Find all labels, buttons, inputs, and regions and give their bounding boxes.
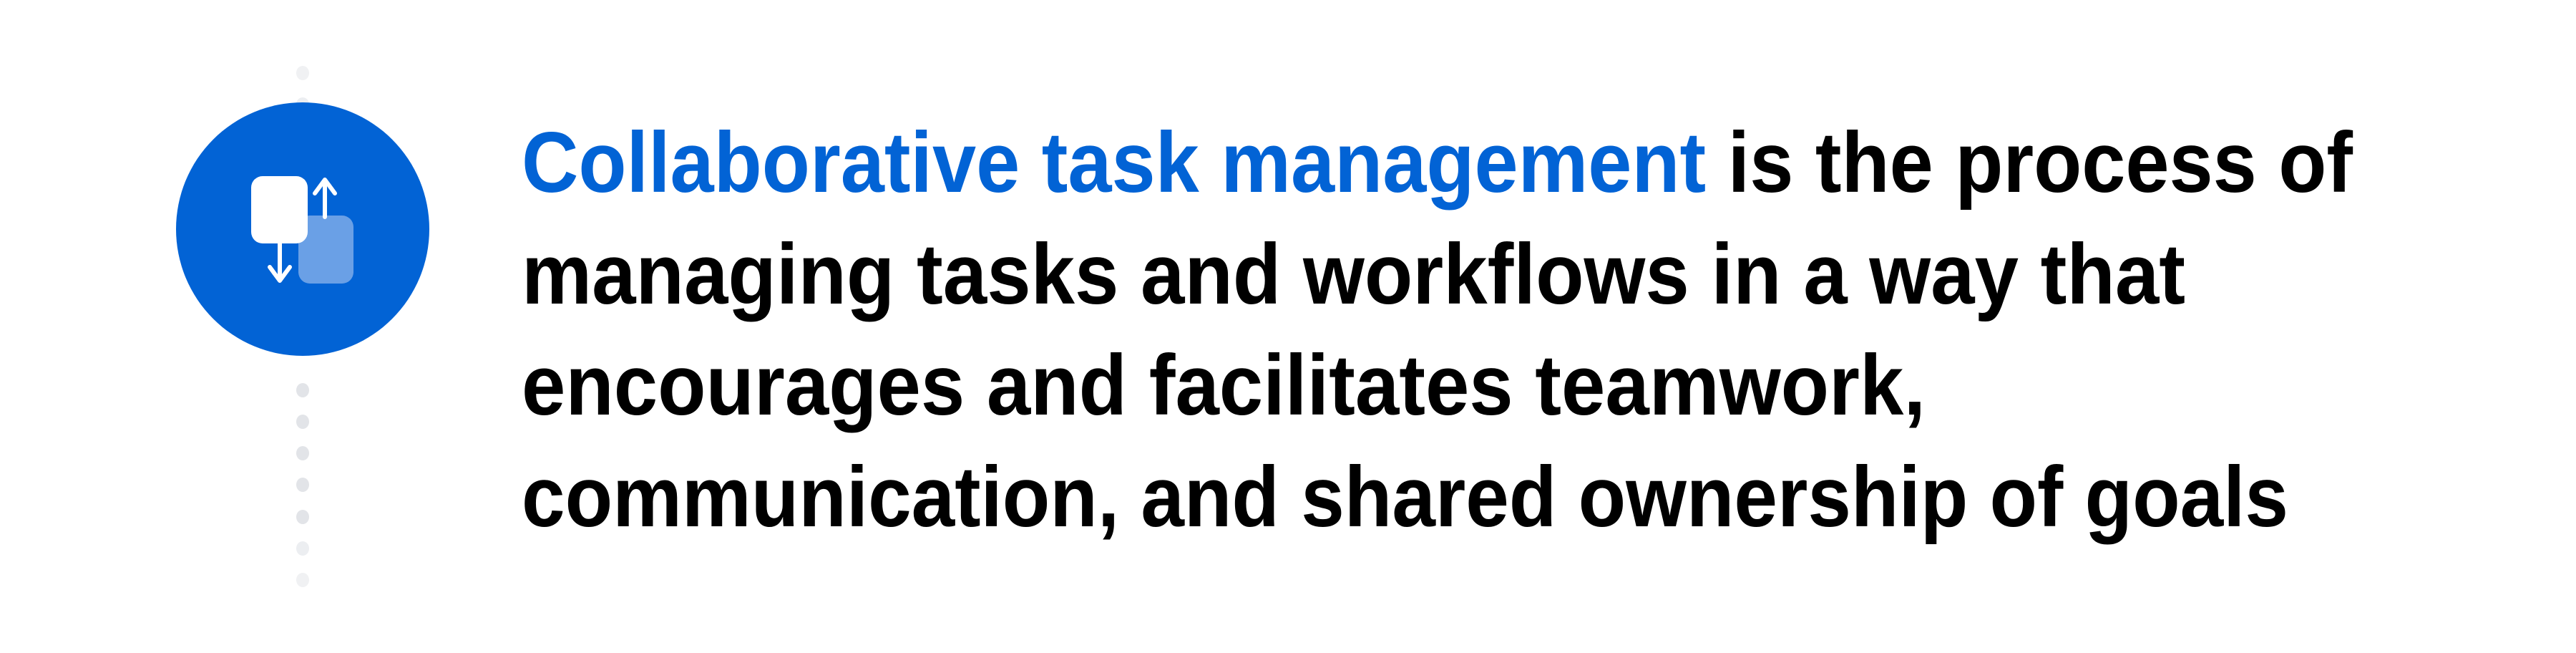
- dotted timeline: [296, 66, 309, 587]
- text block: definition: Collaborative task management is the process of: [522, 115, 2353, 211]
- icon: task swap circle: [176, 102, 429, 356]
- text block: definition: communication, and shared ownership of goals: [522, 449, 2288, 545]
- text block: definition: [522, 115, 2353, 545]
- text block: definition: encourages and facilitates teamwork,: [522, 337, 1926, 433]
- text block: definition: managing tasks and workflows in a way that: [522, 226, 2185, 322]
